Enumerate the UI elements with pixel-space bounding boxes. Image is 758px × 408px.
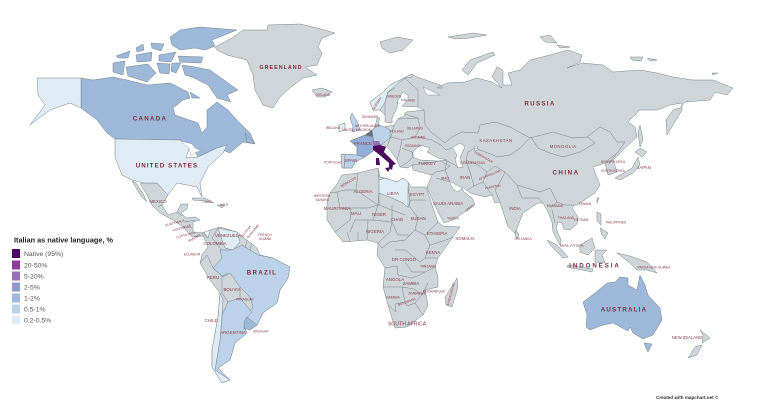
country labels: small: MOROCCO	[340, 176, 357, 188]
country labels: small: PHILIPPINES	[606, 220, 627, 224]
country labels: medium: SOUTH AFRICA	[388, 322, 427, 328]
legend item: Native: Native (95%)	[24, 251, 63, 258]
country: Canada	[81, 77, 255, 157]
country labels: small: HAITI	[220, 203, 228, 207]
country labels: small: NETHERLANDS	[355, 124, 380, 128]
country labels: small: SAHARA	[315, 198, 330, 202]
country: Chile	[212, 293, 230, 383]
region: Africa	[327, 168, 460, 328]
country labels: small: BELARUS	[407, 126, 423, 130]
country: Belgium	[365, 130, 373, 137]
country: France	[350, 135, 376, 157]
country labels: large: CANADA	[133, 116, 167, 122]
country labels: small: MADAGASCAR	[446, 281, 456, 306]
country labels: medium: EGYPT	[410, 192, 425, 197]
region: South America	[200, 227, 290, 383]
region: Iceland	[312, 88, 332, 97]
country labels: medium: NEW ZEALAND	[672, 335, 702, 340]
country labels: small: PARAGUAY	[236, 298, 255, 302]
region: Eurasia	[341, 50, 733, 245]
country labels: medium: MONGOLIA	[550, 144, 576, 149]
country labels: small: FRENCH	[258, 233, 272, 237]
country labels: large: RUSSIA	[524, 100, 556, 108]
legend title: Italian as native language, %	[14, 236, 113, 244]
country labels: medium: LIBYA	[387, 191, 399, 196]
country labels: small: NORWAY	[372, 96, 383, 111]
country: Libya	[379, 178, 410, 207]
country labels: large: CHINA	[552, 170, 580, 176]
country labels: medium: PERU	[207, 275, 219, 280]
country labels: small: POLAND	[390, 130, 404, 134]
Great Lakes	[181, 141, 201, 156]
sea: White Sea	[423, 87, 440, 95]
country labels: large: BRAZIL	[247, 270, 277, 276]
country labels: small: IRAQ	[441, 176, 449, 180]
country labels: small: ICELAND	[316, 93, 331, 97]
country labels: small: PAKISTAN	[485, 184, 502, 190]
country: Norway	[370, 74, 412, 110]
legend item: 0.5-1%: 0.5-1%	[24, 306, 46, 314]
country labels: medium: JAPAN	[637, 165, 651, 170]
country labels: small: SOUTH KOREA	[601, 169, 626, 173]
country labels: medium: FRANCE	[354, 141, 372, 146]
country labels: medium: CHAD	[391, 217, 403, 222]
country: Spain	[344, 154, 365, 168]
country: Australia	[583, 275, 662, 339]
country labels: medium: SPAIN	[345, 158, 357, 163]
country labels: small: NAMIBIA	[386, 296, 401, 300]
country labels: small: THAILAND	[558, 216, 575, 220]
country labels: small: GUATEMALA	[165, 218, 186, 228]
country labels: medium: SUDAN	[410, 216, 426, 221]
country labels: large: GREENLAND	[259, 65, 303, 71]
country labels: medium: MAURITANIA	[324, 206, 350, 211]
legend item: 1-2%: 1-2%	[24, 296, 40, 302]
country labels: small: DENMARK	[362, 115, 379, 119]
country labels: small: GUIANA	[259, 237, 272, 241]
country labels: small: COSTA RICA	[176, 230, 197, 240]
country labels: small: FINLAND	[401, 98, 416, 102]
country labels: medium: ZAMBIA	[403, 281, 419, 286]
country labels: small: SWEDEN	[387, 94, 402, 98]
country labels: medium: NIGER	[372, 212, 386, 217]
country labels: small: VIETNAM	[574, 218, 589, 222]
country labels: small: NORTH KOREA	[601, 160, 626, 164]
country: Tasmania	[644, 343, 652, 352]
country: Italy	[373, 145, 396, 172]
country labels: small: MOZAMBIQUE	[423, 290, 446, 294]
country labels: small: ECUADOR	[184, 252, 201, 256]
region: Arctic Eurasian islands	[380, 33, 718, 75]
country labels: medium: SOMALIA	[455, 236, 475, 241]
country labels: medium: COLOMBIA	[203, 241, 227, 246]
country borders	[158, 78, 625, 315]
country labels: small: YEMEN	[447, 216, 459, 220]
country labels: small: IRELAND	[326, 126, 341, 130]
region: New Zealand	[688, 330, 710, 358]
country labels: small: TAIWAN	[579, 202, 592, 206]
country: Switzerland	[372, 141, 381, 146]
region: Baja California	[132, 181, 147, 202]
legend item: 20-50%: 20-50%	[24, 262, 47, 270]
country labels: small: WESTERN	[314, 194, 331, 198]
country: Brazil	[213, 245, 290, 325]
country labels: small: ROMANIA	[405, 144, 421, 148]
country labels: medium: NIGERIA	[366, 229, 384, 234]
legend	[12, 236, 113, 324]
country labels: small: BOTSWANA	[397, 297, 417, 307]
country labels: large: AUSTRALIA	[601, 306, 647, 314]
country labels: medium: IRAN	[460, 175, 470, 180]
country labels: medium: BOLIVIA	[223, 287, 241, 292]
legend item: 2-5%: 2-5%	[24, 284, 40, 292]
country labels: medium: MALI	[351, 211, 361, 216]
country labels: medium: TURKEY	[418, 161, 436, 166]
country labels: small: ZIMBABWE	[408, 292, 427, 296]
country: Alaska	[30, 78, 81, 125]
country labels: small: CUBA	[202, 200, 212, 204]
region: Mexico and Central America	[140, 183, 208, 238]
region: Caribbean islands	[192, 198, 225, 208]
country labels: small	[165, 93, 671, 334]
legend item: 0.2-0.5%: 0.2-0.5%	[24, 318, 51, 324]
country labels: medium: ALGERIA	[353, 189, 373, 194]
country labels: small: GUYANA	[240, 224, 253, 238]
country labels: small: AFGHANISTAN	[478, 169, 502, 181]
country labels: large	[133, 65, 647, 314]
region: Asian islands	[515, 125, 657, 273]
country labels: small: TANZANIA	[420, 264, 437, 268]
country labels: medium: MALAYSIA	[560, 243, 584, 248]
country labels: medium: CHILE	[205, 318, 218, 323]
country labels: medium: KAZAKHSTAN	[480, 138, 512, 143]
country: Venezuela	[218, 228, 240, 250]
footer credit: Created with mapchart.net ©	[656, 394, 719, 400]
country: Ireland	[339, 123, 345, 132]
country labels: large: UNITED STATES	[136, 162, 198, 170]
country labels: small: SRI LANKA	[514, 237, 532, 241]
country labels: medium: MEXICO	[149, 199, 167, 204]
country: Portugal	[341, 154, 345, 168]
country labels: small: MYANMAR	[547, 204, 564, 208]
country labels: medium: VENEZUELA	[215, 233, 241, 238]
region: Madagascar	[445, 278, 458, 307]
country: United Kingdom	[350, 113, 360, 132]
country labels: small: SURINAME	[246, 223, 261, 239]
country labels: medium: ANGOLA	[386, 277, 404, 282]
country labels: medium: SAUDI ARABIA	[433, 201, 463, 206]
country: Argentina	[215, 298, 252, 380]
country labels: small: UKRAINE	[411, 136, 426, 140]
country labels: medium: DR CONGO	[392, 257, 417, 262]
sea: Caspian Sea	[452, 143, 465, 168]
country labels: small: HONDURAS	[172, 223, 192, 232]
sea: Aral Sea	[474, 146, 478, 151]
country: United States	[115, 139, 227, 197]
country: Uruguay	[244, 317, 257, 330]
country labels: medium: ARGENTINA	[220, 330, 246, 335]
country labels: small: TURKMENISTAN	[459, 161, 486, 165]
country labels: small: OMAN	[464, 203, 475, 213]
country labels: medium: KENYA	[426, 250, 440, 255]
region: Greenland	[215, 24, 335, 108]
country labels: small: PANAMA	[188, 233, 202, 243]
country: Canadian Arctic islands	[113, 27, 255, 144]
sea: Black Sea	[413, 145, 447, 161]
country labels: small: URUGUAY	[253, 330, 270, 334]
country labels: medium: ETHIOPIA	[427, 231, 447, 236]
country: Germany	[372, 125, 390, 145]
country labels: large: INDONESIA	[569, 262, 621, 270]
country labels: small: UZBEKISTAN	[474, 150, 494, 164]
country labels: small: UNITED KINGDOM	[343, 128, 372, 132]
country labels: medium	[149, 138, 702, 340]
country labels: medium: INDIA	[509, 206, 521, 211]
country labels: small: PORTUGAL	[324, 160, 342, 164]
legend item: 5-20%: 5-20%	[24, 274, 44, 280]
country labels: small: PAPUA NEW GUINEA	[638, 266, 671, 270]
